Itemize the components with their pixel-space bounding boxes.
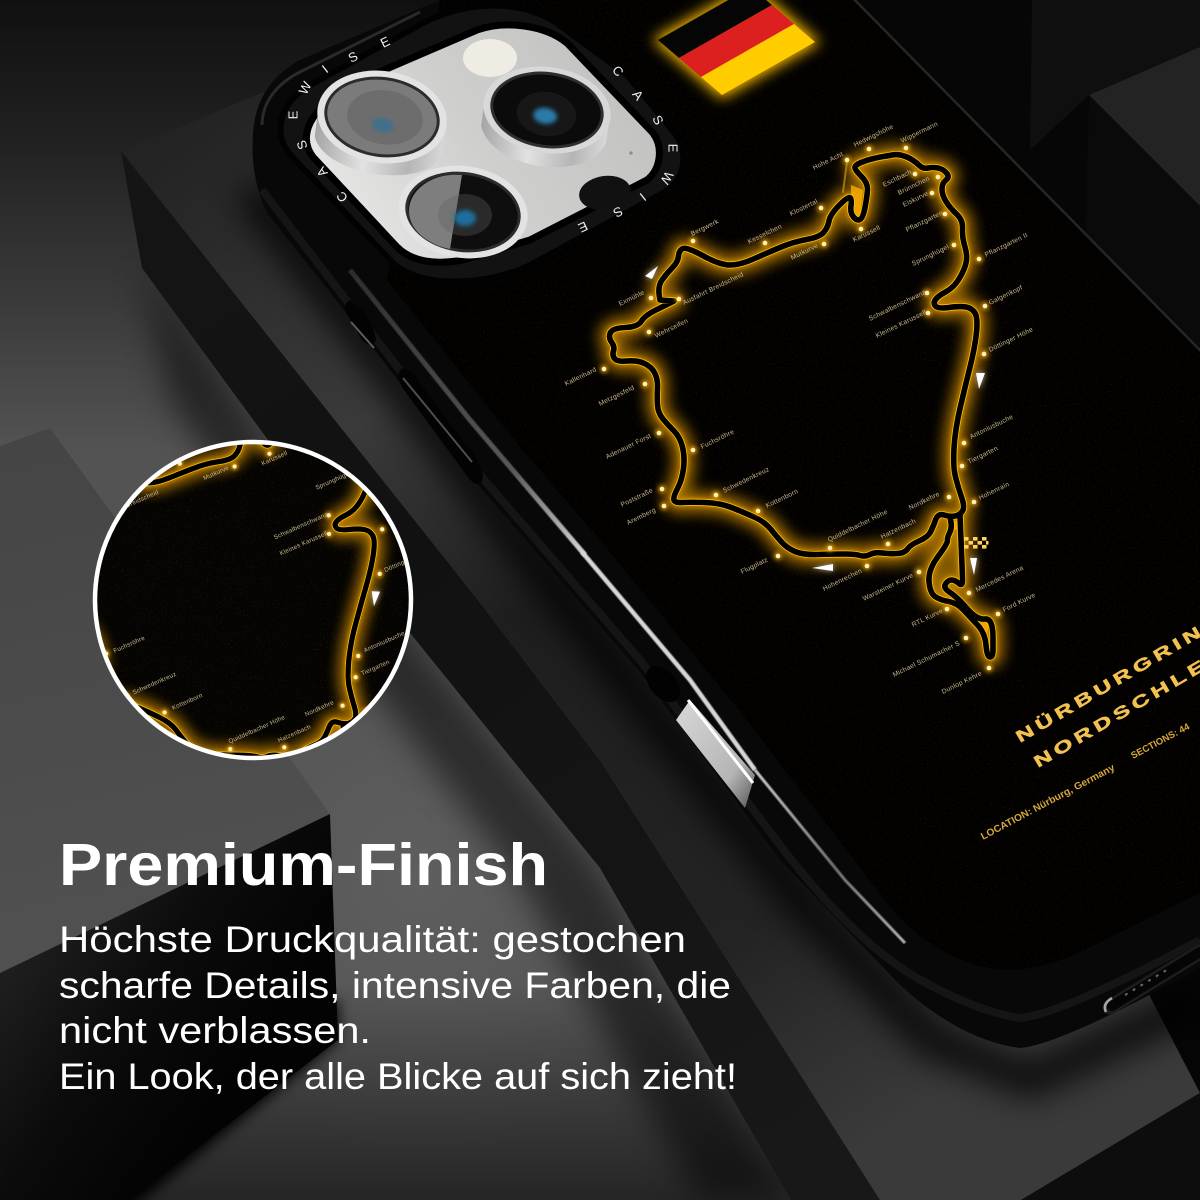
background: low block top surface — [0, 428, 330, 973]
track section labels: Ford Kurve — [1002, 592, 1037, 614]
body text: Ein Look, der alle Blicke auf sich zieht! — [59, 1056, 737, 1097]
track section labels: Wehrseifen — [654, 318, 689, 340]
track section labels: Hatzenbach — [880, 518, 917, 541]
track section labels: Pflanzgarten II — [984, 232, 1029, 259]
CASEWISE ring lettering: S — [293, 138, 311, 152]
magnified track: Döttinger Höhe — [383, 549, 428, 574]
track section labels: Wippermann — [900, 121, 939, 145]
track section labels: Poststraße — [620, 487, 654, 509]
track section labels: Kleines Karussell — [875, 309, 928, 340]
track section labels: Galgenkopf — [988, 284, 1024, 307]
track section labels: Döttinger Höhe — [988, 326, 1034, 354]
CASEWISE ring lettering — [286, 33, 680, 236]
magnifier circle — [92, 440, 414, 760]
track section labels: Hohenrain — [978, 481, 1011, 502]
race track — [609, 155, 993, 657]
body text — [59, 919, 737, 1097]
poster title and facts: SECTIONS: 44 — [1129, 721, 1192, 762]
magnified track: Sprunghügel — [315, 470, 352, 492]
CASEWISE ring lettering: E — [286, 110, 300, 119]
track section labels: Dunlop Kehre — [941, 670, 983, 696]
poster title and facts: LOCATION: Nürburg, Germany — [979, 762, 1117, 843]
magnified track: Kleines Karussell — [279, 530, 329, 557]
flag of Germany — [658, 0, 815, 95]
CASEWISE ring lettering: A — [629, 87, 647, 103]
track section labels: Brünnchen — [897, 175, 931, 197]
magnified track: Schwalbenschwanz — [273, 511, 329, 541]
track section labels: Exmühle — [618, 289, 646, 308]
camera lens: bottom — [392, 157, 534, 267]
body text: nicht verblassen. — [59, 1010, 371, 1051]
track section labels: Klostertal — [789, 198, 819, 218]
track section labels: Kottenborn — [765, 488, 800, 510]
bottom charging port — [1105, 952, 1200, 1012]
poster title and facts: NORDSCHLEIFE — [1031, 628, 1200, 771]
CASEWISE ring lettering: I — [637, 190, 649, 204]
track section labels: Adenauer Forst — [605, 433, 652, 461]
track section labels: Mercedes Arena — [975, 565, 1025, 594]
CASEWISE ring lettering: A — [313, 164, 331, 180]
magnified track: Quiddelbacher Höhe — [228, 714, 287, 745]
CASEWISE ring lettering: E — [378, 33, 392, 51]
track section labels: Michael Schumacher S — [892, 640, 961, 679]
track section labels: Fuchsröhre — [700, 429, 736, 451]
phone rim highlights — [350, 270, 905, 943]
track section labels: Schwalbenschwanz — [868, 289, 928, 323]
direction arrows and start-finish checker — [645, 266, 988, 575]
magnified track: Antoniusbuche — [363, 630, 406, 654]
magnified track: Fuchsröhre — [113, 635, 146, 655]
camera island ring — [262, 6, 683, 282]
track section labels: Karussell — [852, 224, 882, 244]
phone back panel — [380, 0, 1200, 980]
magnified track: Karussell — [261, 450, 289, 467]
CASEWISE ring lettering: S — [649, 113, 667, 128]
lidar sensor — [577, 151, 633, 213]
CASEWISE ring lettering: W — [657, 169, 677, 188]
track section labels: Quiddelbacher Höhe — [827, 509, 889, 544]
track section labels: Flugplatz — [740, 556, 770, 576]
phone case body — [253, 0, 1200, 1048]
track section labels: Hedwigshöhe — [853, 124, 895, 149]
track section labels: Eiskurve — [902, 190, 930, 209]
CASEWISE ring lettering: S — [346, 48, 361, 66]
magnified track — [98, 444, 404, 756]
CASEWISE ring lettering: E — [576, 218, 590, 236]
track section labels: Hohe Acht — [812, 151, 845, 172]
magnified track: Kottenborn — [171, 692, 204, 712]
side buttons — [345, 300, 483, 484]
track section labels: Bergwerk — [690, 218, 720, 238]
background: low block dark front face — [0, 814, 338, 1200]
magnified track: Tiergarten — [360, 659, 391, 677]
track section labels: Kallenhard — [564, 366, 598, 388]
magnified track: Schwedenkreuz — [132, 671, 178, 696]
magnified track: Nordkehre — [304, 699, 335, 718]
camera flash — [463, 39, 517, 77]
CASEWISE ring lettering: I — [319, 62, 331, 76]
track section labels: Ausfahrt Breidscheid — [682, 271, 745, 307]
CASEWISE ring lettering: W — [295, 78, 315, 97]
track section labels: Schwedenkreuz — [722, 466, 771, 495]
track section labels: Tiergarten — [967, 445, 999, 466]
track section labels: Mutkurve — [790, 243, 819, 262]
track section labels: Metzgesfeld — [598, 384, 636, 408]
CASEWISE ring lettering: S — [610, 203, 625, 221]
body text: scharfe Details, intensive Farben, die — [59, 965, 731, 1006]
track section labels: Sprunghügel — [911, 244, 951, 268]
track section labels: Pflanzgarten — [905, 210, 944, 234]
silver camera control button — [640, 660, 755, 808]
magnified track: Mutkurve — [202, 464, 230, 482]
CASEWISE ring lettering: C — [333, 189, 351, 205]
track section labels: RTL Kurve — [911, 608, 944, 629]
camera lens: upper left — [310, 62, 453, 183]
background: large block side face — [121, 151, 880, 1200]
track section labels: Aremberg — [626, 507, 657, 527]
track section labels: Warsteiner Kurve — [862, 572, 915, 603]
CASEWISE ring lettering: E — [666, 144, 680, 153]
heading: Premium-Finish — [59, 832, 548, 898]
track section labels: Hohenrechen — [822, 568, 863, 593]
track section markers — [600, 144, 1002, 672]
poster title and facts — [979, 608, 1200, 843]
camera lens: upper right — [476, 59, 616, 175]
track section labels: Kesselchen — [747, 223, 783, 246]
camera window — [306, 25, 659, 262]
track section labels: Eschbach — [882, 169, 913, 189]
magnified track: Hatzenbach — [277, 723, 312, 744]
body text: Höchste Druckqualität: gestochen — [59, 919, 686, 960]
track section labels: Nordkehre — [908, 491, 941, 512]
track section labels: Antoniusbuche — [969, 414, 1015, 441]
magnified track: Ausfahrt Breidscheid — [100, 489, 160, 520]
background: upper right dark blocks — [1030, 0, 1200, 360]
CASEWISE ring lettering: C — [609, 63, 627, 79]
poster title and facts: NÜRBURGRING — [1012, 608, 1200, 746]
track section labels — [564, 121, 1037, 696]
